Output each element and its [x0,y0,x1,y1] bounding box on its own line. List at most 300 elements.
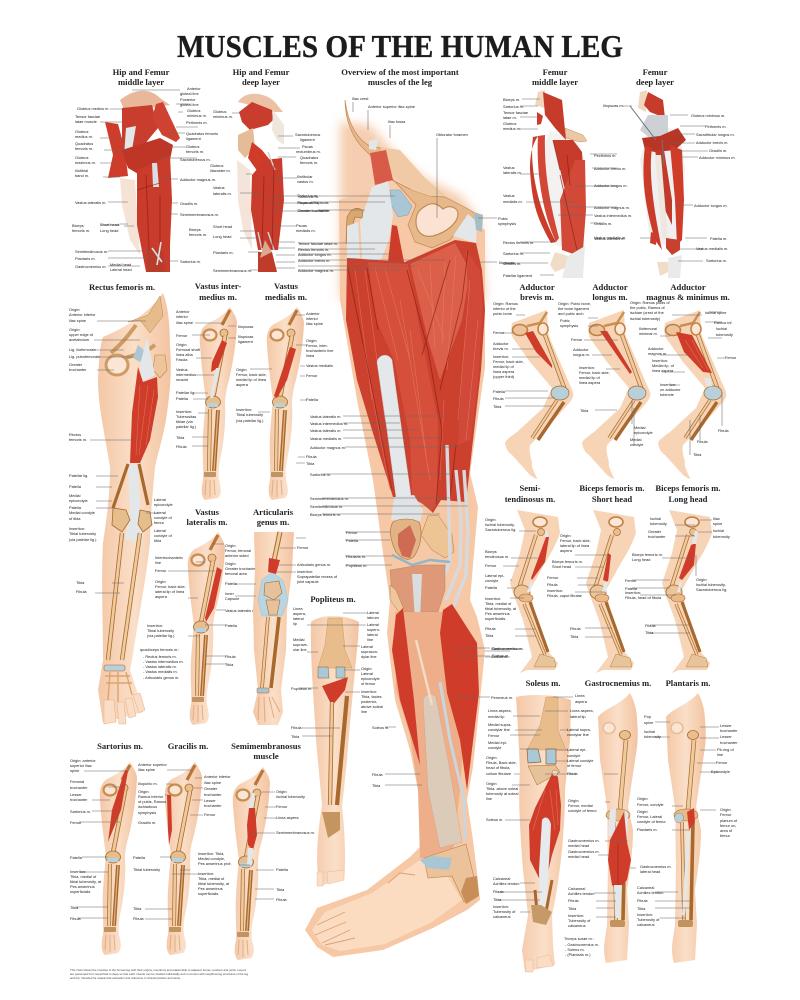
labels: iliacoster m. [210,168,231,173]
labels: Tibia, medial of [485,601,512,606]
labels: Greater trochanter [225,566,257,571]
medial tendon patch [453,214,477,243]
skin halo of hip [340,122,486,300]
labels: Tibia [485,633,494,638]
panel: quadriceps list: - Vastus intermedius m. [143,659,184,664]
toes [258,697,280,722]
labels: aspera [575,699,588,704]
meniscus band [392,555,450,565]
labels: calcaneus [568,923,586,928]
labels: lip [293,621,297,626]
labels [236,311,333,466]
labels: calcaneus [637,922,655,927]
pelvis and iliac bone [345,100,478,248]
labels: Pubic [560,318,570,323]
labels: band m. [75,173,89,178]
femoral condyle [421,515,454,558]
heading: middle layer [118,77,164,87]
labels: tibial tuberosity, at [485,606,517,611]
labels: Insertion: [297,569,313,574]
second curved band [538,135,559,242]
labels: Femur [485,563,497,568]
skin [516,695,571,972]
left flap muscle [105,122,128,178]
labels: Patella [485,585,498,590]
labels: tuberosity at soleal [486,791,519,796]
gluteal tendon [640,115,668,140]
labels: Adductor brevis m. [594,166,626,171]
soleus muscle [529,772,561,885]
labels [176,309,254,449]
labels: linea aspera [579,380,601,385]
labels: Sacrotuberous lig. [696,587,727,592]
labels: the bone ligament [558,306,590,311]
labels: Patella [493,389,506,394]
labels: Tibia, facies [361,694,382,699]
labels: Medial condyle, [198,856,225,861]
labels: Medial [293,637,305,642]
labels: Biceps [72,223,84,228]
labels: Insertion: [236,407,252,412]
labels: Biceps femoris m. [632,552,663,557]
overview labels: Soleus m. [491,654,508,659]
labels: Medial [630,437,642,442]
labels: trochanter [720,728,738,733]
list: Triceps surae m.: [564,936,594,941]
labels: Rectus [69,432,81,437]
labels: Origin: Ramus [493,301,518,306]
heading: Popliteus m. [310,594,356,604]
center bone [655,155,668,240]
tibial plateau [528,765,560,785]
labels: Femur [547,575,559,580]
overview labels: Vastus lateralis m. [310,428,342,433]
overview labels: Adductor magnus m. [298,268,334,273]
labels: Sartorius m. [503,251,524,256]
labels: femoris m. [75,146,93,151]
labels: Semimembranosus m. [213,268,252,273]
labels: Psoas [302,144,313,149]
labels: Pit-ring of [717,747,735,752]
labels: Insertion: [579,365,595,370]
labels: lateralis m. [213,191,232,196]
labels: Vastus medialis m. [696,246,728,251]
labels [291,606,383,739]
labels: Femur, back side, [155,584,186,589]
labels: epicondyle [361,676,380,681]
labels: Femur [204,812,216,817]
labels: Soleus m. [486,817,503,822]
labels: medial head [568,854,589,859]
pubic bone [565,128,587,142]
overview labels: Biceps femoris m. [310,512,341,517]
heading: Gracilis m. [168,741,208,751]
labels: Adductor magnus m. [594,205,630,210]
labels: Fibula [76,589,87,594]
labels: Tibia, medial of [70,874,97,879]
overview labels: Iliac fossa [388,119,406,124]
labels: spine [70,768,79,773]
labels: Fibula, caput fibulae [547,593,582,598]
labels: inferior of the [493,306,516,311]
top iliac arch [120,91,170,112]
labels: Sacrotuberous m. [180,157,211,162]
labels [198,789,315,902]
labels: Tibial tuberosity [133,867,160,872]
labels: Patella [306,397,319,402]
labels: Fibula [70,916,81,921]
labels: intermedius [176,372,196,377]
labels: Linea aspera, [488,708,512,713]
panel: plantaris [637,678,738,963]
heading: Gastrocnemius m. [585,678,651,688]
knee [550,252,568,272]
tendon origins [608,808,628,840]
labels: superficialis [198,891,218,896]
toes [104,693,145,724]
labels: Femur [306,373,318,378]
toe lines and foot tendon lines [315,873,415,945]
leg [662,510,712,673]
distal tendon [125,465,148,542]
overview labels: Tibia [372,783,381,788]
labels: epicondyle [154,502,173,507]
tendon [210,368,220,398]
labels: trochanter [648,534,666,539]
labels: Fibula [306,454,317,459]
labels: Gluteus [210,163,223,168]
panel: quadriceps list: - Vastus medialis m. [143,669,178,674]
labels: Gluteus medius m. [77,106,109,111]
labels: Tensor fasciae [75,114,100,119]
heading: overview: Overview of the most important [341,67,459,77]
heading: Sartorius m. [97,741,143,751]
labels: Tibia [637,906,646,911]
labels: iliac spine [306,321,323,326]
heading: Soleus m. [526,678,560,688]
labels: Femur, medial [568,803,593,808]
footer note: This chart shows the muscles of the human leg with their origins, insertions and relationship to adjacent bones, tendons and joints. Layers [70,968,247,972]
muscle stripe [685,340,708,370]
fibular head [552,770,558,776]
ankle bones [322,812,340,838]
labels: condylar line [567,732,589,737]
labels [235,538,338,596]
labels: minimus m. [187,113,207,118]
heading: brevis m. [520,292,554,302]
labels: Plantaris m. [637,827,658,832]
overview labels: Iliopsoas m. [298,200,319,205]
iliotibial tendon sheet [360,181,393,262]
central grey strip [152,163,159,187]
labels: Short head [100,222,119,227]
lateral tendon strip [347,222,360,258]
labels [558,301,653,447]
labels: Tibia [493,897,502,902]
fascia line [630,106,664,165]
labels: Capsule [225,596,239,601]
labels: trochanter [204,792,222,797]
labels: Origin: [138,789,149,794]
labels: ligament [186,136,202,141]
panel: gracilis [133,741,231,955]
labels: of pubis, Ramus [138,799,166,804]
labels: rectumbrus m. [296,149,321,154]
labels: Origin: [155,579,166,584]
heading: Semimembranosus [231,741,301,751]
labels: upper edge of [69,332,94,337]
labels: Ischial spine [705,310,726,315]
labels: Pes anserinus [485,611,510,616]
heading: Hip and Femur [113,67,169,77]
labels: Femur [725,355,737,360]
skin [237,160,252,250]
labels: Patella [69,484,82,489]
labels: Ramus inf. [714,320,733,325]
labels: Quadratus femoris [186,131,218,136]
labels: Tibia [306,461,315,466]
labels: linea aspera [493,369,515,374]
labels: gluteal line [180,102,199,107]
labels: magnus m. [648,351,667,356]
labels: minimal m. [639,331,658,336]
labels: tuberosity [650,521,667,526]
labels: Lateral [154,528,166,533]
labels: of femur [361,681,376,686]
shin tendon streak [416,640,432,705]
labels: labrum [367,615,379,620]
heading: medialis m. [265,292,307,302]
labels: condyle of femur [568,808,597,813]
heading: Hip and Femur [233,67,289,77]
labels: Articularis genus m. [297,562,331,567]
labels: Gluteus [213,109,226,114]
patella red patch [398,525,416,558]
labels: Lateral [154,497,166,502]
labels: Linea [293,606,303,611]
labels: spine [644,720,653,725]
labels: Sartorius m. [706,258,727,263]
labels: ischial tuberosity) [630,316,661,321]
patella ring [113,464,148,508]
labels: Fascia [176,357,188,362]
labels: lateral [293,616,304,621]
heading: Rectus femoris m. [89,282,155,292]
tibia plateau [266,600,280,615]
labels: lateral lip of linea [155,589,185,594]
thigh muscles [137,155,172,272]
shin bones [108,533,140,660]
soleus fibres [533,790,558,830]
heading: deep layer [636,77,674,87]
labels [72,86,219,272]
labels: Femur [297,545,309,550]
heading: Femur [643,67,667,77]
labels: tuberosity [716,332,733,337]
labels: Gracilis m. [594,221,612,226]
heel shading [461,876,479,904]
foot bones [105,672,132,703]
panel: femur deep layer [594,67,736,278]
labels: Lesser [720,723,732,728]
labels: trochanter [720,740,738,745]
overview labels: Pubic [498,216,508,221]
labels: Sacrotuberous lig. [485,527,516,532]
labels: Femur [720,812,732,817]
labels: Femur, femoral [225,548,251,553]
labels: Posterior [180,97,196,102]
labels: Fibula [645,623,656,628]
labels: Insertion: [147,623,163,628]
labels: medial head [568,843,589,848]
insertion tendon [704,378,712,387]
rectus origin tendon [369,139,378,150]
overview labels: Fibularis m. [346,554,366,559]
femur [527,697,566,750]
heading: Vastus inter- [195,281,241,291]
heading: deep layer [242,77,280,87]
overview labels: Gastrocnemius m. [491,646,523,651]
labels: Achilles tendon [637,890,663,895]
heading: Femur [543,67,567,77]
labels: tibial tuberosity, at [70,879,102,884]
leg skin [98,293,171,723]
overview labels: Greater trochanter [298,208,330,213]
labels [147,543,257,667]
muscle divisions [348,250,468,505]
labels: medial lip of [579,375,601,380]
overview labels: Soleus m. [372,725,389,730]
overview labels: Popliteus m. [346,563,367,568]
labels: longus m. [573,352,590,357]
panel: quadriceps list: - Articularis genus m. [143,675,179,680]
labels: Fibula [133,916,144,921]
labels: Gluteus minimus m. [691,113,725,118]
lateral muscle [670,145,684,245]
gastrocnemius muscle [440,604,479,790]
labels: Fibula [567,771,578,776]
labels: medius m. [503,126,521,131]
labels: Lig. iliofemorale [69,347,96,352]
top bone [638,90,647,112]
patella [390,519,421,559]
overview labels: Patella [346,538,359,543]
labels [625,516,730,635]
labels: Greater [69,362,83,367]
greater trochanter [153,355,167,378]
labels: aspera [155,594,168,599]
labels: trochanter [204,803,222,808]
labels: Patella [625,586,638,591]
labels: Tibia [580,408,589,413]
labels: Insertion: [69,526,85,531]
labels: Intertrochanteric [155,555,183,560]
labels: Femoral shaft [176,347,201,352]
panel: hip and femur deep layer [189,67,329,273]
leg [510,510,560,673]
heading: Biceps femoris m. [655,483,721,493]
peroneus muscle [392,608,420,765]
labels: Fibula [291,725,302,730]
pubic bone tip [474,212,483,232]
labels: Origin: [720,807,731,812]
labels: Iliopubic m. [138,781,158,786]
panel: soleus [486,678,594,972]
labels: Fibula [718,428,729,433]
tendon [124,126,136,156]
labels: Sacrofibular longus m. [696,132,735,137]
overview labels: Tensor fasciae latae m. [298,241,338,246]
overview labels: Peroneus m. [491,695,513,700]
left long curved band [530,136,556,243]
labels: Gastrocnemius m. [568,849,600,854]
femoral head [390,190,412,217]
overview labels: Semimembranosus m. [310,496,349,501]
labels: Epicondyle [711,769,730,774]
labels: muscle [176,377,188,382]
tendon [249,793,255,810]
labels: Fibula [493,889,504,894]
plantaris muscle [687,808,695,830]
panel: vastus intermedius [176,281,254,500]
labels: Medial [634,425,646,430]
heading: lateralis m. [186,517,228,527]
labels: Fibula [637,898,648,903]
labels: Tibia [70,905,79,910]
labels: Adductor magnus m. [180,177,216,182]
labels: Tuberosity of [568,918,591,923]
condyles [527,749,556,764]
muscle [531,537,549,580]
text: are presented from superficial to deep so that each muscle can be studied individually and in context with neighbouring structures of the leg [70,972,249,976]
labels: Ramus inferior [138,794,164,799]
text block: quadriceps femoris m.: [140,647,179,652]
panel: vastus medialis [236,281,333,500]
leg [267,307,304,500]
hip joint beige [238,128,255,158]
labels: Insertion: [652,358,668,363]
labels: planum of [720,818,738,823]
labels: symphysis [138,810,156,815]
labels: tubercle [660,392,674,397]
labels: tibiae (via [176,419,193,424]
tibia [330,696,347,805]
fibula head [390,585,405,612]
labels: Pop [644,714,651,719]
labels: Anterior [306,311,320,316]
panel: popliteus [291,594,383,886]
labels: Ischial [716,326,727,331]
labels: Fibula [547,582,558,587]
labels: Adductor [648,346,664,351]
heading: muscle [253,751,279,761]
labels: epicondyle [69,498,88,503]
labels: trochanter [69,367,87,372]
labels: Sartorius m. [297,193,318,198]
labels: Femur, Lateral [637,814,662,819]
heading: overview: muscles of the leg [368,77,433,87]
labels: Biceps [189,227,201,232]
labels: inferior [176,314,189,319]
labels: Tuberositas [176,414,196,419]
overview labels: Obturator foramen [436,132,468,137]
short rotators [122,138,173,175]
muscle [274,347,296,398]
labels: Gluteus [75,129,88,134]
panel: semitendinosus [485,483,560,673]
labels: Patella [70,855,83,860]
labels: Vastus lateralis m. [225,608,256,613]
